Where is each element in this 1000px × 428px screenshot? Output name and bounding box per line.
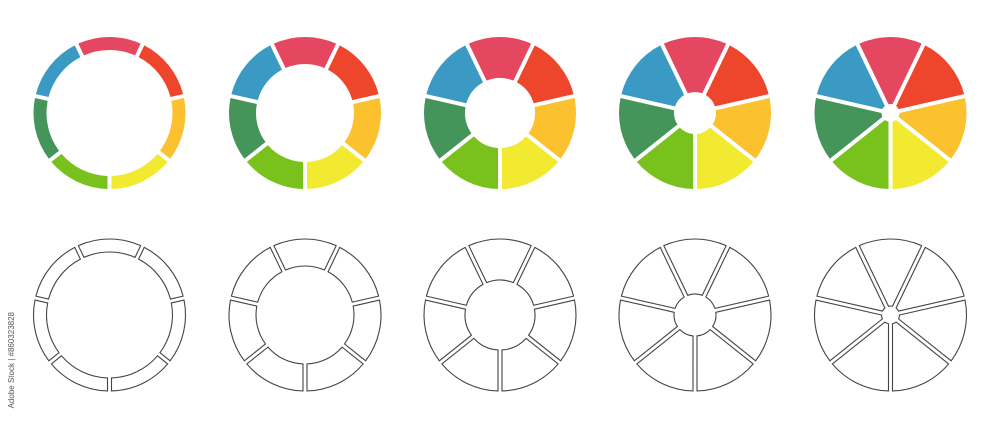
colored donut 2 — [224, 37, 386, 195]
colored donut 1 — [28, 37, 191, 195]
colored donut 5 — [809, 37, 972, 195]
outline donut 5 — [809, 239, 972, 397]
outline donut 1 — [28, 239, 191, 397]
outline donut 3 — [419, 239, 581, 397]
colored donut 4 — [614, 37, 776, 195]
colored donut 3 — [419, 37, 581, 195]
stock id text: Adobe Stock | #860323828 — [7, 311, 16, 408]
outline donut 4 — [614, 239, 776, 397]
outline donut 2 — [224, 239, 386, 397]
